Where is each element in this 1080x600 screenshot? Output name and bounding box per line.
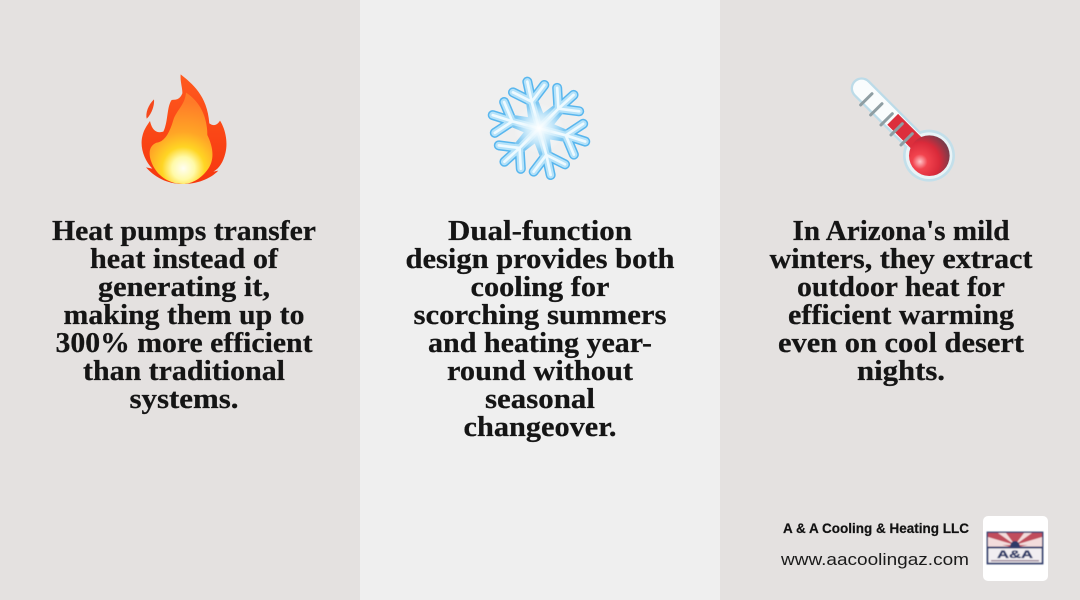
text block: right panel: [770, 215, 1033, 387]
text block: right panel: nights.: [857, 355, 945, 387]
text block: left panel: generating it,: [98, 271, 270, 303]
text block: right panel: In Arizona's mild: [792, 215, 1010, 247]
text block: middle panel: seasonal: [485, 383, 595, 415]
text block: middle panel: scorching summers: [414, 299, 666, 331]
text block: left panel: systems.: [130, 383, 238, 415]
text block: right panel: efficient warming: [788, 299, 1015, 331]
text block: left panel: Heat pumps transfer: [52, 215, 316, 247]
text block: middle panel: changeover.: [464, 411, 616, 443]
icon: thermometer: [861, 88, 955, 182]
text block: middle panel: and heating year-: [428, 327, 652, 359]
logo: company badge: A&A: [997, 549, 1033, 561]
text block: middle panel: cooling for: [470, 271, 610, 303]
panel: middle background: [360, 0, 720, 600]
icon: snowflake: [486, 82, 592, 175]
text block: left panel: making them up to: [64, 299, 304, 331]
text block: middle panel: Dual-function: [448, 215, 632, 247]
logo: company badge: [983, 516, 1048, 581]
icon: fire: [142, 74, 226, 184]
text block: left panel: 300% more efficient: [56, 327, 313, 359]
text block: left panel: than traditional: [83, 355, 285, 387]
panel: right background: [720, 0, 1080, 600]
footer: company name: A & A Cooling & Heating LLC: [783, 520, 969, 536]
text block: right panel: outdoor heat for: [797, 271, 1005, 303]
text block: middle panel: design provides both: [406, 243, 674, 275]
panel: left background: [0, 0, 360, 600]
footer: website: www.aacoolingaz.com: [780, 550, 969, 569]
text block: left panel: heat instead of: [90, 243, 278, 275]
text block: middle panel: [406, 215, 674, 443]
text block: middle panel: round without: [447, 355, 633, 387]
text block: left panel: [52, 215, 316, 415]
text block: right panel: winters, they extract: [770, 243, 1033, 275]
text block: right panel: even on cool desert: [778, 327, 1024, 359]
